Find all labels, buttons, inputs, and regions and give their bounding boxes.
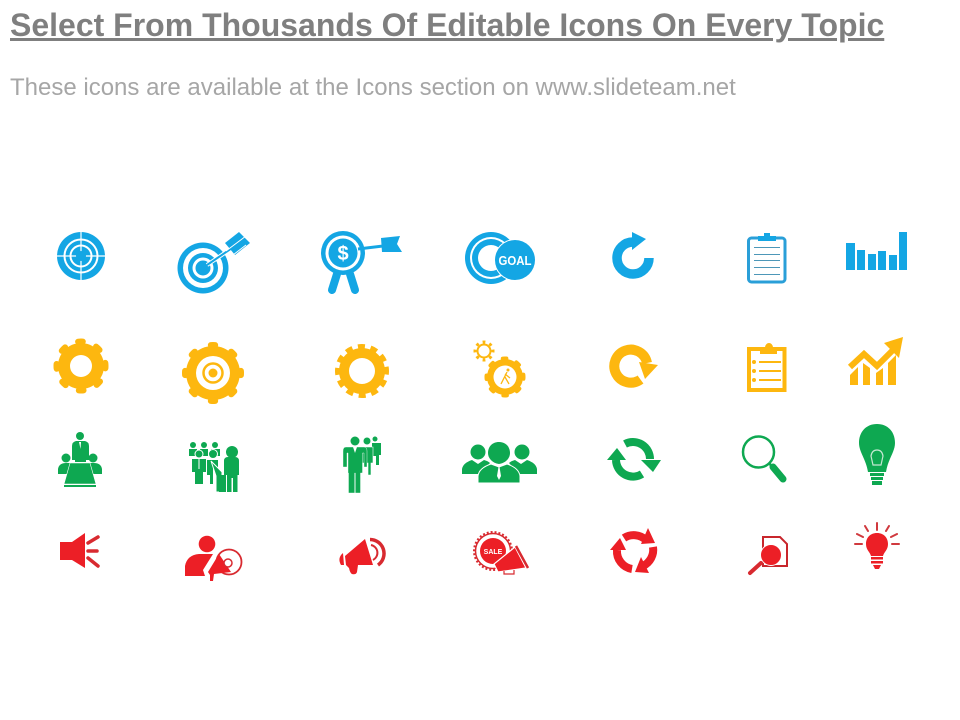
icon: refresh arrow: [617, 232, 649, 274]
icon: gear with target: [185, 345, 241, 401]
icon: person with megaphone: [185, 536, 242, 581]
icon: megaphone with sound waves: [339, 539, 384, 574]
icon: sale badge with megaphone: SALE: [484, 549, 503, 556]
icon: checklist clipboard: [749, 343, 784, 390]
icon: magnifier: [743, 436, 783, 479]
icon: three business people: [462, 442, 537, 483]
icon: green light bulb: [859, 424, 895, 485]
icon: target with arrow: [178, 232, 250, 294]
row: blue icons: [57, 231, 907, 294]
icon: sale badge with megaphone: [474, 532, 528, 574]
icon: sync arrows: [607, 442, 661, 477]
icon: circular arrow: [614, 350, 658, 383]
icon: document search: [750, 537, 787, 573]
icon: goal target: [465, 232, 536, 284]
icon: three circular arrows: [610, 528, 655, 573]
icon: gears with walking man: [475, 342, 524, 396]
icon: speaker: [60, 533, 98, 568]
icon: line of businessmen: [343, 436, 381, 493]
icon: dollar target with dart: [321, 231, 402, 290]
subtitle: These icons are available at the Icons section on www.slideteam.net: [10, 74, 736, 101]
icon: gear: [56, 342, 106, 390]
icon: crowd of people: [189, 442, 239, 492]
icon: boardroom meeting: [58, 432, 102, 487]
icon: red light bulb with rays: [855, 523, 899, 569]
title: Select From Thousands Of Editable Icons On Every Topic: [10, 7, 884, 43]
icon: goal target: GOAL: [498, 253, 532, 268]
row: red icons: [60, 523, 899, 581]
icon: crosshair target: [57, 232, 105, 280]
icon: cog wheel: [338, 347, 386, 395]
row: yellow icons: [56, 337, 903, 401]
icon: rising chart: [850, 337, 903, 385]
icon: bar chart: [846, 232, 907, 270]
row: green icons: [58, 424, 895, 493]
icon: dollar target with dart: $: [337, 243, 349, 265]
icon: clipboard: [748, 233, 785, 282]
